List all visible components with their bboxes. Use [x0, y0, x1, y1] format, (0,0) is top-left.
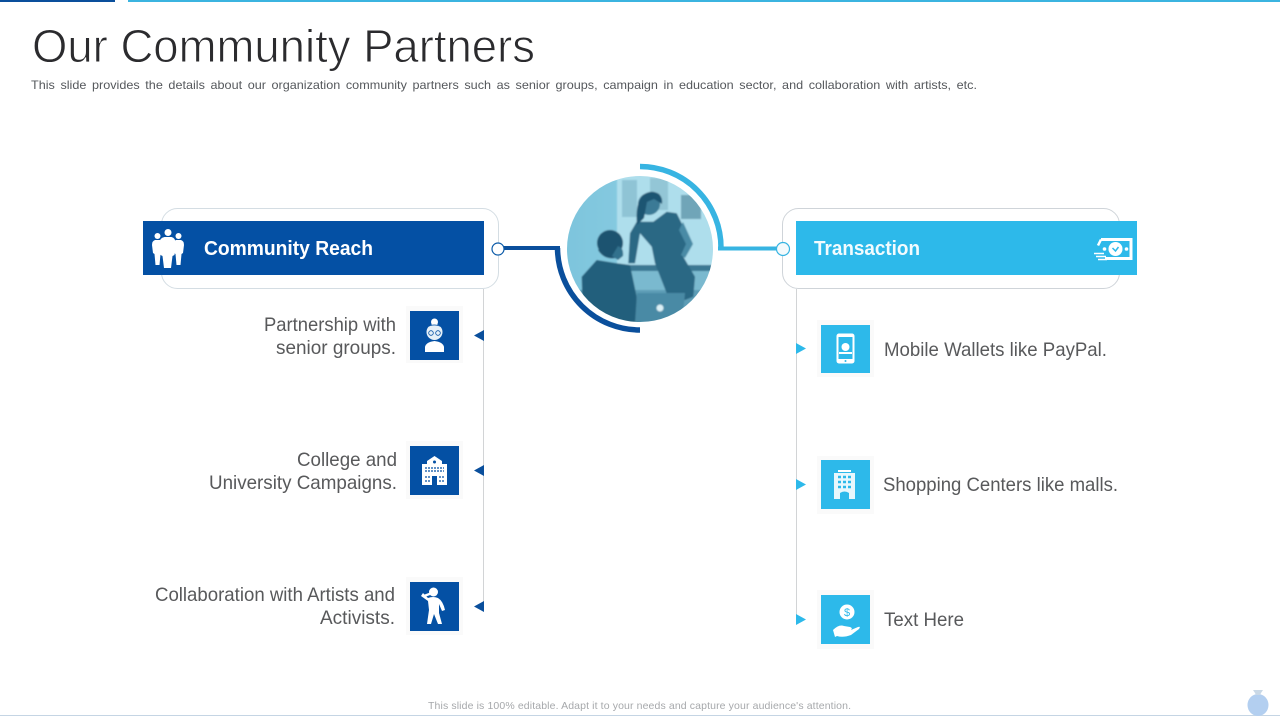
arc: light blue [640, 166, 721, 248]
text: University Campaigns. [209, 472, 397, 494]
top accent bars [0, 0, 1280, 2]
text [264, 314, 396, 359]
photo: two women at a laptop [567, 176, 713, 322]
panel: transaction header [782, 208, 1137, 288]
item: shopping centers [796, 456, 1118, 514]
text: Shopping Centers like malls. [883, 474, 1118, 496]
icon: hand with coin: $ [844, 607, 850, 619]
icon: mall building [834, 470, 855, 499]
text: Activists. [320, 607, 395, 629]
item: mobile wallets [796, 320, 1107, 377]
text: Partnership with [264, 314, 396, 336]
item: collaboration with artists and activists [155, 577, 484, 635]
text: Text Here [884, 609, 964, 631]
icon: college building [422, 456, 447, 485]
text [209, 449, 397, 494]
icon: money bag [1248, 690, 1268, 716]
left column rule [482, 289, 484, 606]
arc: dark blue [558, 248, 640, 330]
footer note: This slide is 100% editable. Adapt it to your needs and capture your audience's attention. [428, 700, 851, 712]
item: partnership with senior groups [264, 306, 484, 363]
text: College and [297, 449, 397, 471]
connector: right [718, 242, 790, 256]
title: Our Community Partners [32, 20, 535, 72]
connector: left [492, 243, 560, 255]
icon: senior woman [425, 318, 444, 352]
right column rule [796, 289, 798, 620]
icon: mobile wallet [836, 334, 854, 364]
text: Mobile Wallets like PayPal. [884, 339, 1107, 361]
item: college and university campaigns [209, 441, 484, 499]
item: text here [796, 590, 964, 649]
icon: hand with coin [833, 604, 860, 637]
footer rule [0, 715, 1280, 716]
text: Collaboration with Artists and [155, 584, 395, 606]
icon: money [1094, 240, 1131, 260]
text: senior groups. [276, 337, 396, 359]
icon: singer [421, 588, 445, 624]
heading: transaction: Transaction [814, 238, 920, 260]
panel: community reach header [143, 208, 498, 288]
icon: people group [152, 229, 184, 268]
subtitle: This slide provides the details about our organization community partners such as senior groups, campaign in education sector, and collaboration with artists, etc. [31, 78, 977, 92]
heading: community reach: Community Reach [204, 238, 373, 260]
text [155, 584, 395, 629]
